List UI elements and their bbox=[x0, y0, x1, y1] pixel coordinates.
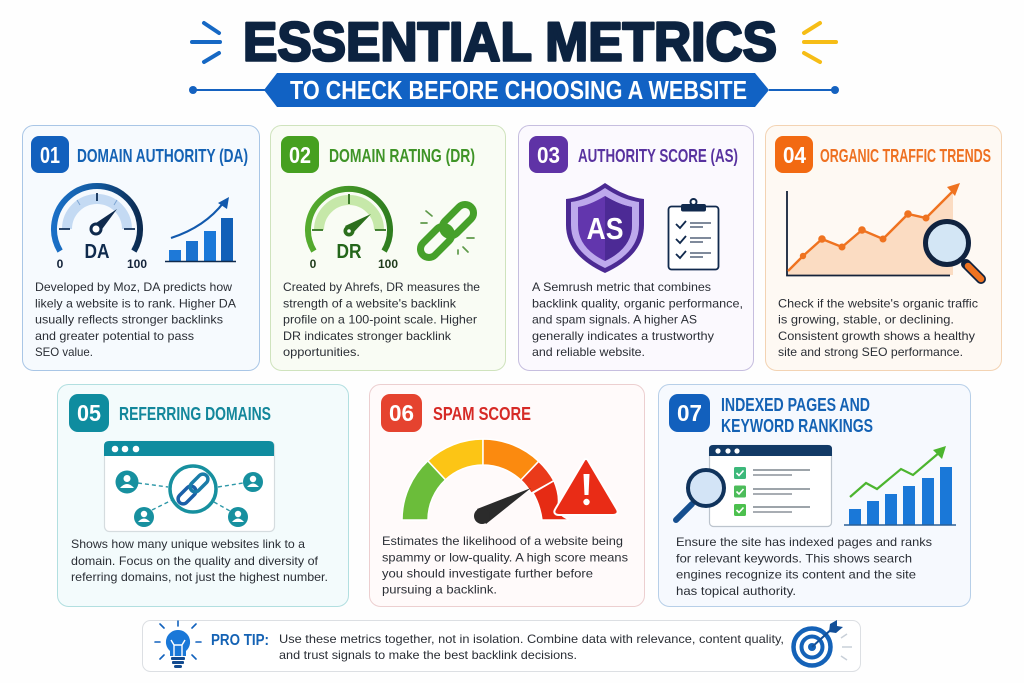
description: has topical authority. bbox=[676, 584, 796, 598]
heading: REFERRING DOMAINS bbox=[119, 403, 271, 424]
icon: chain link bbox=[417, 201, 477, 261]
badge 02 bbox=[281, 136, 319, 173]
gauge: DA: 0 bbox=[57, 257, 64, 271]
badge 07 bbox=[669, 394, 710, 432]
badge 02: 02 bbox=[289, 142, 311, 168]
icon: magnifier bbox=[676, 470, 724, 520]
icon: warning triangle bbox=[556, 461, 616, 513]
panel: indexed pages bbox=[658, 384, 970, 606]
icon: magnifier bbox=[926, 222, 981, 279]
icon: user nodes bbox=[116, 470, 263, 527]
heading: KEYWORD RANKINGS bbox=[721, 415, 873, 436]
description: pursuing a backlink. bbox=[382, 582, 497, 596]
icon: yellow rays bbox=[804, 23, 836, 62]
description bbox=[532, 280, 743, 359]
description bbox=[778, 296, 978, 359]
gauge: DA bbox=[54, 186, 147, 271]
panel: referring domains bbox=[58, 384, 348, 606]
heading: DOMAIN RATING (DR) bbox=[329, 145, 475, 166]
badge 01 bbox=[31, 136, 69, 173]
description: SEO value. bbox=[35, 345, 93, 359]
browser network illustration bbox=[104, 441, 274, 532]
description: Developed by Moz, DA predicts how bbox=[35, 280, 232, 294]
browser checklist bbox=[709, 445, 832, 526]
heading: DOMAIN AUTHORITY (DA) bbox=[77, 145, 248, 166]
label: PRO TIP: bbox=[211, 632, 269, 649]
heading: AUTHORITY SCORE (AS) bbox=[578, 145, 738, 166]
badge 06: 06 bbox=[389, 400, 414, 426]
description: backlink quality, organic performance, bbox=[532, 296, 743, 310]
badge 04 bbox=[775, 136, 813, 173]
badge 03 bbox=[529, 136, 568, 173]
icon: light bulb bbox=[155, 621, 201, 668]
heading: INDEXED PAGES AND bbox=[721, 394, 870, 415]
gauge: DR bbox=[308, 189, 398, 271]
gauge: DA: 100 bbox=[127, 257, 147, 271]
tip text: and trust signals to make the best backlink decisions. bbox=[279, 648, 577, 662]
line chart bbox=[787, 183, 960, 276]
description: engines recognize its content and the site bbox=[676, 568, 916, 582]
description: Created by Ahrefs, DR measures the bbox=[283, 280, 480, 294]
icon: target bbox=[794, 620, 852, 666]
description: Estimates the likelihood of a website being bbox=[382, 534, 623, 548]
badge 05: 05 bbox=[77, 400, 101, 426]
description: opportunities. bbox=[283, 345, 360, 359]
description bbox=[35, 280, 236, 359]
gauge: DA: DA bbox=[84, 241, 110, 263]
heading bbox=[721, 394, 873, 436]
badge 07: 07 bbox=[677, 400, 702, 426]
bar chart with arrow bbox=[165, 197, 236, 262]
gauge: DR: 0 bbox=[310, 257, 317, 271]
description bbox=[283, 280, 480, 359]
description: DR indicates stronger backlink bbox=[283, 329, 452, 343]
subtitle banner: TO CHECK BEFORE CHOOSING A WEBSITE bbox=[290, 75, 747, 105]
tip text: Use these metrics together, not in isolation. Combine data with relevance, content quality, bbox=[279, 632, 784, 646]
gauge: DR: DR bbox=[336, 241, 362, 263]
badge 04: 04 bbox=[783, 142, 806, 168]
description bbox=[71, 537, 328, 584]
description: and spam signals. A higher AS bbox=[532, 312, 697, 326]
description: spammy or low-quality. A high score means bbox=[382, 550, 628, 564]
icon: blue rays bbox=[192, 23, 220, 62]
panel: spam score bbox=[370, 384, 644, 606]
heading: SPAM SCORE bbox=[433, 403, 531, 424]
badge 06 bbox=[381, 394, 422, 432]
description: is growing, stable, or declining. bbox=[778, 312, 954, 326]
description: Check if the website's organic traffic bbox=[778, 296, 978, 310]
description: referring domains, not just the highest number. bbox=[71, 570, 328, 584]
description: and greater potential to pass bbox=[35, 329, 194, 343]
description: usually reflects stronger backlinks bbox=[35, 312, 223, 326]
gauge: DR: 100 bbox=[378, 257, 398, 271]
badge 05 bbox=[69, 394, 109, 432]
description: profile on a 100-point scale. Higher bbox=[283, 312, 477, 326]
description: Ensure the site has indexed pages and ranks bbox=[676, 535, 932, 549]
description: you should investigate further before bbox=[382, 566, 593, 580]
icon: AS shield: AS bbox=[586, 211, 624, 246]
description: A Semrush metric that combines bbox=[532, 280, 711, 294]
tip text bbox=[279, 632, 784, 662]
icon: AS shield bbox=[566, 183, 644, 273]
panel: domain authority bbox=[22, 126, 260, 370]
description: site and strong SEO performance. bbox=[778, 345, 963, 359]
description bbox=[676, 535, 932, 598]
badge 01: 01 bbox=[40, 142, 60, 168]
description bbox=[382, 534, 628, 596]
description: generally indicates a trustworthy bbox=[532, 329, 714, 343]
bar chart with trend line bbox=[844, 446, 956, 525]
title: ESSENTIAL METRICS bbox=[243, 10, 777, 72]
description: Shows how many unique websites link to a bbox=[71, 537, 305, 551]
panel: domain rating bbox=[270, 126, 506, 370]
icon: clipboard bbox=[668, 199, 718, 270]
description: Consistent growth shows a healthy bbox=[778, 329, 975, 343]
description: likely a website is to rank. Higher DA bbox=[35, 296, 236, 310]
description: and reliable website. bbox=[532, 345, 645, 359]
description: for relevant keywords. This shows search bbox=[676, 552, 912, 566]
badge 03: 03 bbox=[537, 142, 560, 168]
panel: authority score bbox=[518, 126, 754, 370]
callout: pro tip bbox=[142, 620, 860, 672]
description: strength of a website's backlink bbox=[283, 296, 457, 310]
gauge: spam bbox=[402, 439, 568, 524]
panel: organic traffic bbox=[766, 126, 1002, 370]
description: domain. Focus on the quality and diversity of bbox=[71, 554, 319, 568]
